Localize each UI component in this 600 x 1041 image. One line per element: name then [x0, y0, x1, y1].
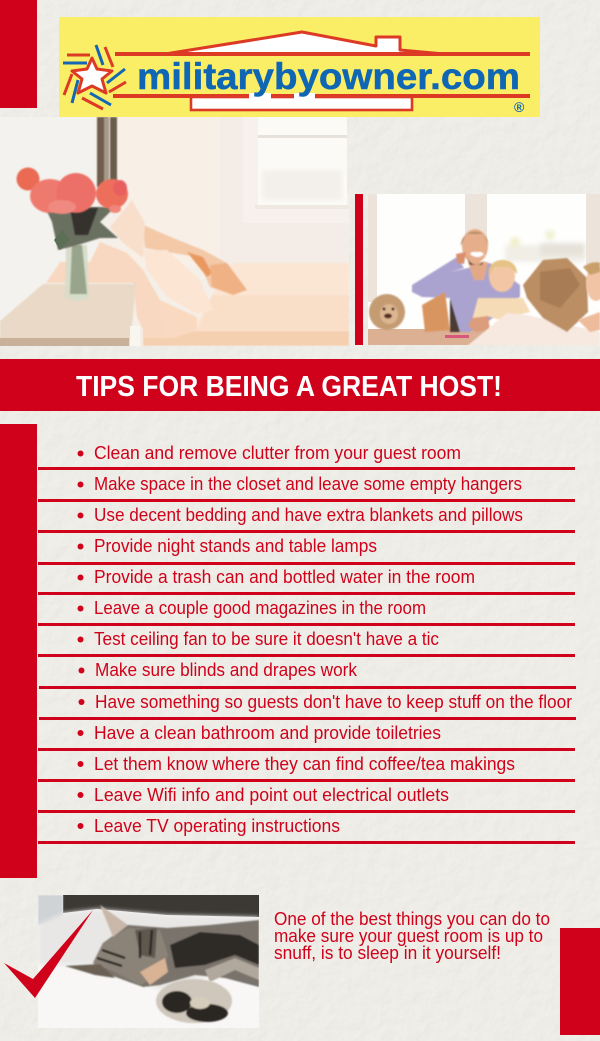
dark background: [63, 895, 259, 917]
vase: [65, 245, 89, 301]
tip 6: [38, 597, 575, 626]
tip 8: [39, 659, 576, 689]
tip 13: Leave TV operating instructions: [94, 815, 340, 836]
red accent bar: photo divider: [355, 194, 363, 345]
logo wordmark: militarybyowner.com: [137, 56, 520, 97]
tip 9: Have something so guests don't have to keep stuff on the floor: [95, 691, 572, 712]
peony flowers: [16, 168, 128, 214]
icon: star emblem: [63, 45, 126, 109]
tip 11: Let them know where they can find coffee/tea makings: [94, 753, 515, 774]
red accent block: left of list: [0, 424, 37, 878]
tip 5: Provide a trash can and bottled water in the room: [94, 566, 475, 587]
tip 2: Make space in the closet and leave some empty hangers: [94, 473, 522, 494]
tip 8: Make sure blinds and drapes work: [95, 659, 358, 680]
tip 9: [39, 691, 576, 720]
blurred outdoor plants: [505, 230, 585, 262]
registered mark: ®: [514, 99, 525, 115]
paw: [156, 979, 232, 1023]
tip 4: Provide night stands and table lamps: [94, 535, 377, 556]
tip 7: Test ceiling fan to be sure it doesn't have a tic: [94, 628, 439, 649]
girl: [467, 258, 600, 346]
bed and bedding: [46, 200, 349, 346]
closing tip text: [274, 908, 550, 963]
title banner: [0, 359, 600, 411]
man: [412, 229, 520, 332]
closing tip text: snuff, is to sleep in it yourself!: [274, 942, 501, 963]
child at right edge: [578, 262, 600, 332]
tip 7: [38, 628, 575, 657]
photo: bedroom with flowers: [0, 117, 349, 346]
window: [258, 117, 347, 205]
flower stems and leaves: [45, 207, 118, 250]
tip 2: [38, 473, 575, 502]
tip 1: Clean and remove clutter from your guest room: [94, 442, 461, 463]
dog: [369, 294, 405, 330]
tip 6: Leave a couple good magazines in the room: [94, 597, 426, 618]
photo: sleeping cat: [38, 895, 259, 1028]
logo: militarybyowner.com: [59, 17, 540, 117]
window frames: [368, 194, 600, 302]
icon: house base: [113, 93, 530, 110]
tip 12: [38, 784, 575, 813]
closing tip text: One of the best things you can do to: [274, 908, 550, 929]
blanket: [38, 909, 259, 990]
tip 3: Use decent bedding and have extra blankets and pillows: [94, 504, 523, 525]
nightstand: [0, 284, 140, 346]
cat body: [65, 905, 259, 987]
tip 4: [38, 535, 575, 565]
tip 5: [38, 566, 575, 595]
tip 11: [38, 753, 575, 782]
tip 12: Leave Wifi info and point out electrical outlets: [94, 784, 449, 805]
table: [368, 329, 495, 345]
tip 1: [38, 442, 575, 470]
title: TIPS FOR BEING A GREAT HOST!: [76, 371, 502, 403]
boy: [468, 260, 530, 332]
icon: red check mark: [4, 910, 93, 998]
tip 3: [38, 504, 575, 533]
closing tip text: make sure your guest room is up to: [274, 925, 543, 946]
red accent block: bottom right: [560, 928, 600, 1035]
tip 10: Have a clean bathroom and provide toiletries: [94, 722, 441, 743]
red accent block: top left: [0, 0, 37, 108]
tip 10: [38, 722, 575, 751]
curtain rods: [97, 117, 117, 187]
checklist of hosting tips: [38, 442, 576, 844]
tip 13: [38, 815, 575, 844]
photo: family at table: [368, 194, 600, 346]
icon: house roof: [115, 32, 530, 56]
